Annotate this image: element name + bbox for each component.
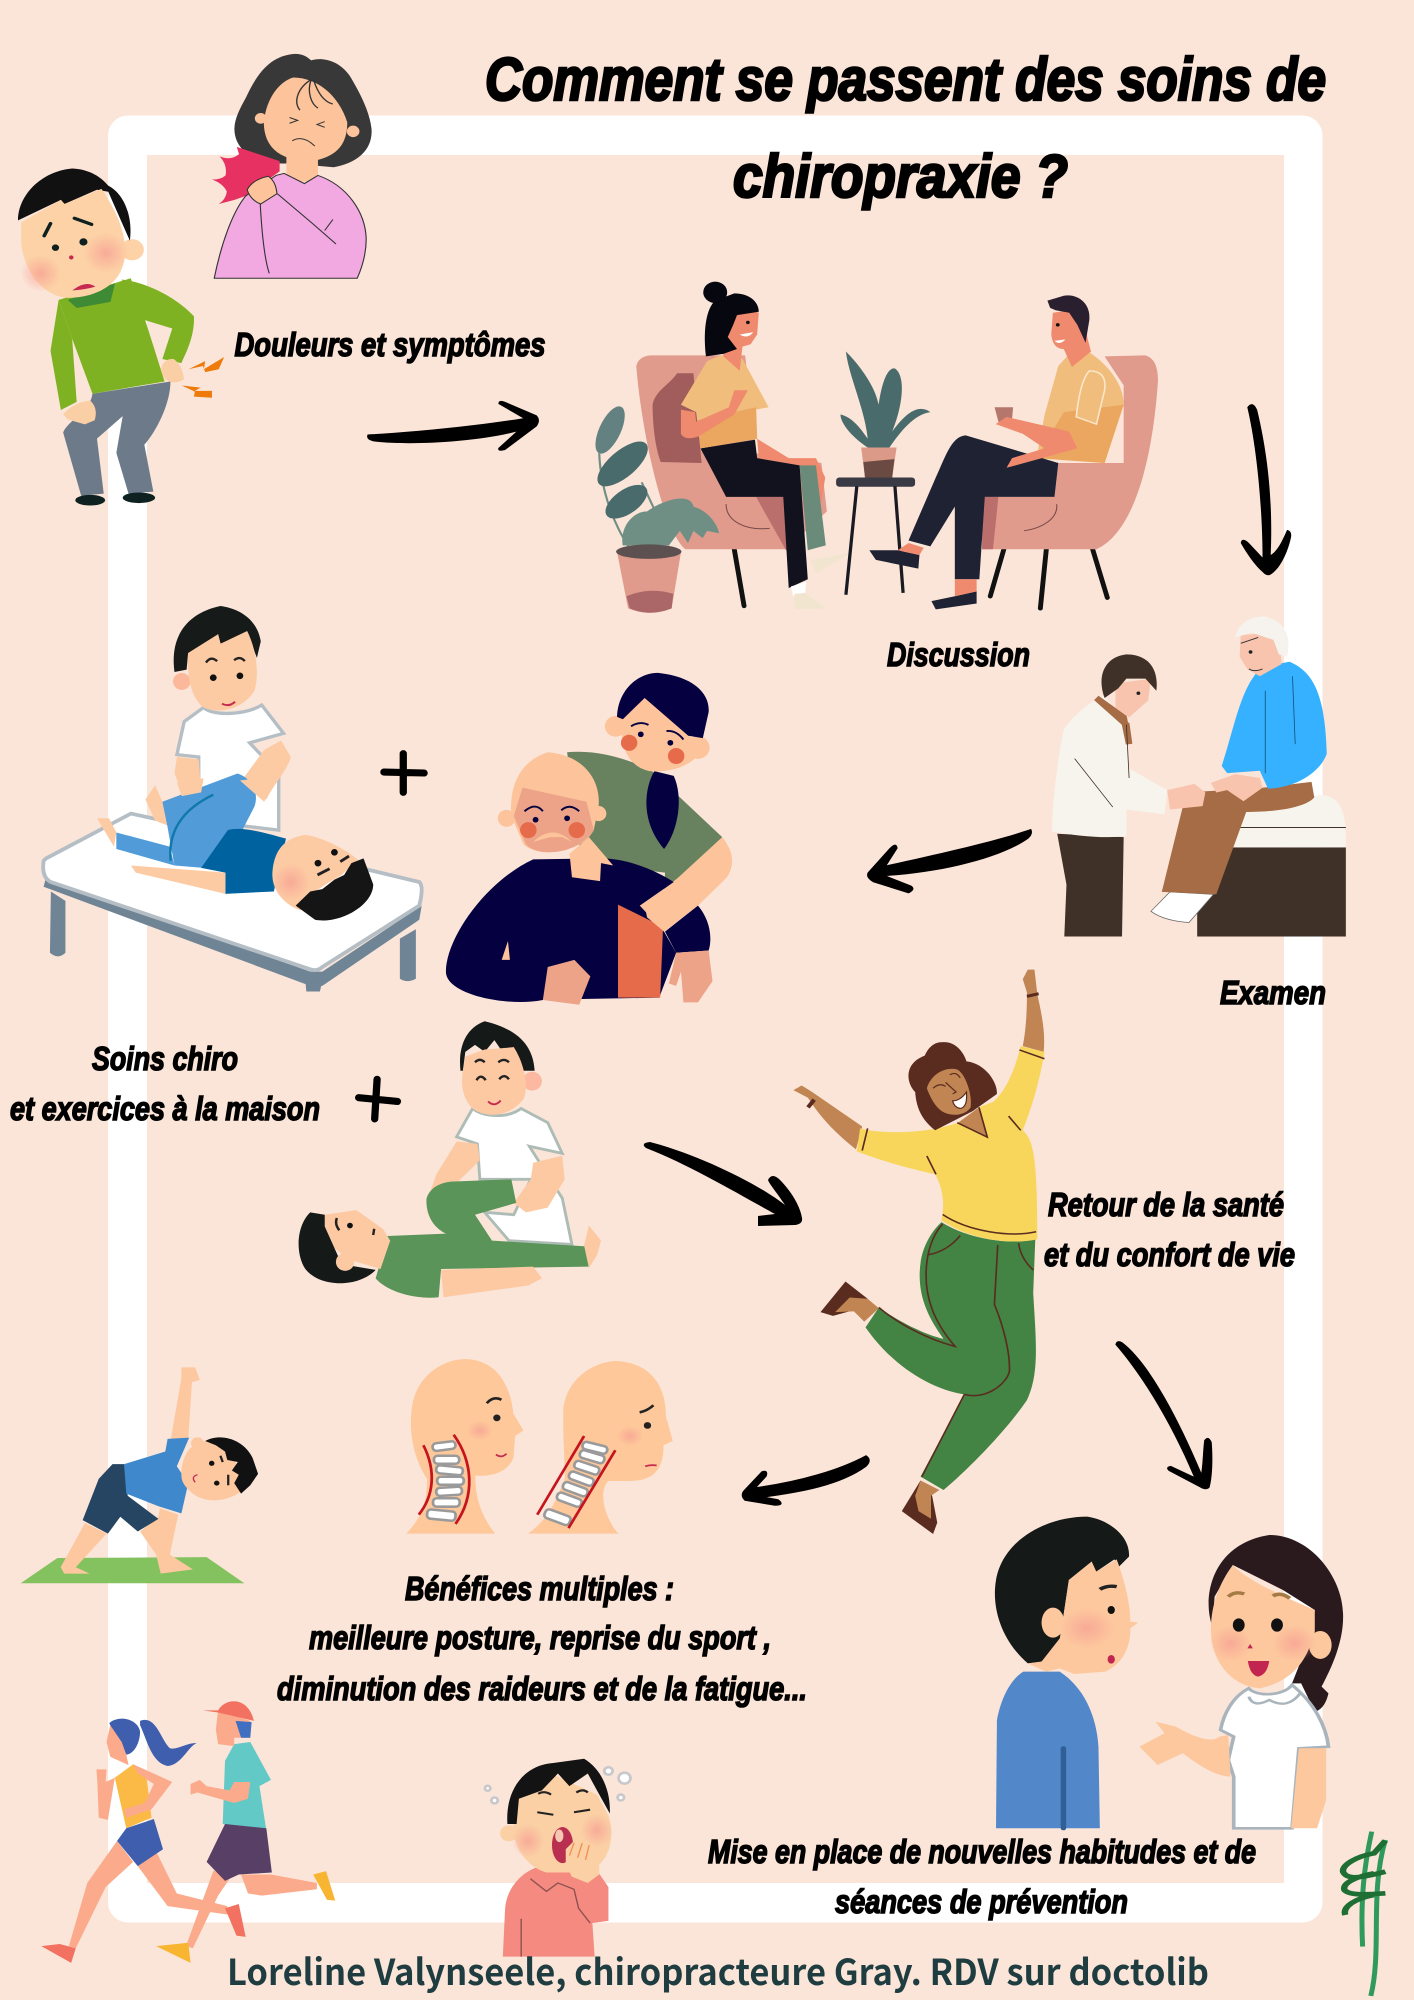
arrow: to benefits: [742, 1456, 869, 1505]
text: Douleurs et symptômes: Douleurs et symptômes: [234, 326, 546, 363]
white rounded frame: [108, 116, 1322, 1922]
illustration: two neck profiles with spine: [406, 1359, 673, 1534]
illustration: yoga stretch: [21, 1367, 258, 1583]
text: Bénéfices multiples: diminution des raideurs et de la fatigue...: [277, 1670, 807, 1707]
text: Soins chiro et exercices: [10, 1040, 320, 1127]
text: Bénéfices multiples: Bénéfices multiples :: [405, 1570, 674, 1607]
text: Bénéfices multiples: [277, 1570, 807, 1707]
illustration: discussion scene: [589, 282, 1158, 613]
title: chiropraxie ?: [733, 143, 1068, 210]
text: Bénéfices multiples: meilleure posture, reprise du sport ,: [309, 1619, 771, 1656]
plus sign: [359, 1079, 397, 1119]
illustration: doctor examining patient: [1052, 617, 1346, 937]
text: Mise en place: séances de prévention: [835, 1883, 1128, 1920]
illustration: therapist with patient on table: [43, 606, 422, 991]
illustration: yawning tired man: [485, 1759, 630, 1957]
logo: green plant symbol: [1343, 1832, 1385, 1996]
title: [485, 46, 1326, 210]
arrow: to examination: [1241, 404, 1291, 575]
arrow: to new habits: [1115, 1341, 1212, 1489]
text: Mise en place: [708, 1833, 1256, 1920]
illustration: runners: [41, 1701, 335, 1963]
plus sign: [384, 754, 424, 792]
text: Retour de la santé: Retour de la santé: [1048, 1186, 1284, 1223]
text: Discussion: Discussion: [887, 636, 1030, 673]
arrow: to discussion: [367, 401, 539, 451]
arrow: to recovery: [644, 1142, 802, 1226]
illustration: woman adjusting man: [446, 673, 732, 1005]
illustration: jumping happy woman: [793, 970, 1044, 1534]
text: Soins chiro et exercices: et exercices à la maison: [10, 1090, 320, 1127]
text: Mise en place: Mise en place de nouvelles habitudes et de: [708, 1833, 1256, 1870]
text: Examen: Examen: [1220, 974, 1326, 1011]
illustration: woman with neck pain: [212, 54, 372, 278]
text: Soins chiro et exercices: Soins chiro: [92, 1040, 238, 1077]
arrow: to care: [867, 829, 1032, 893]
footer text: Loreline Valynseele, chiropracteure Gray. RDV sur doctolib: [227, 1944, 1209, 1996]
text: Retour de la santé: et du confort de vie: [1044, 1236, 1295, 1273]
text: Retour de la santé: [1044, 1186, 1295, 1273]
illustration: man and nurse talking: [995, 1517, 1343, 1828]
illustration: man with back pain: [18, 169, 224, 506]
illustration: therapist with patient lying on floor: [299, 1021, 601, 1298]
